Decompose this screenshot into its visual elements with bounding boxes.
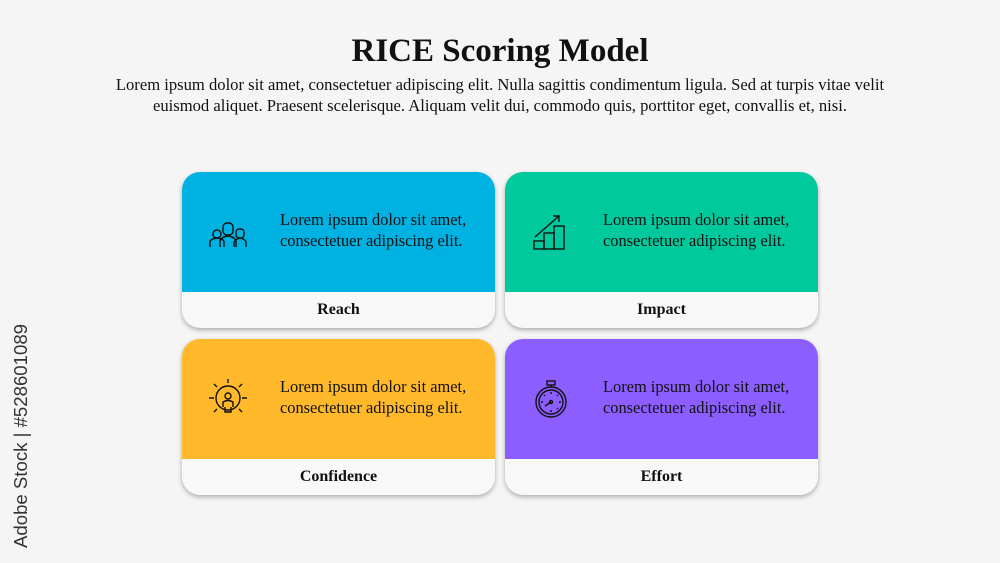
text: consectetuer adipiscing elit. — [280, 398, 463, 417]
text: Lorem ipsum dolor sit amet, — [603, 377, 789, 396]
watermark text: Adobe Stock | #528601089 — [10, 324, 31, 548]
text — [280, 377, 466, 417]
label: Confidence — [300, 468, 377, 485]
title: RICE Scoring Model — [352, 33, 648, 69]
subtitle: Lorem ipsum dolor sit amet, consectetuer adipiscing elit. Nulla sagittis condimentum ligula. Sed at turpis vitae velit euismod aliquet. Praesent scelerisque. Aliquam velit dui, commodo quis, porttitor eget, convallis et, nisi. — [116, 75, 884, 115]
text: Lorem ipsum dolor sit amet, — [603, 210, 789, 229]
icon: stopwatch — [535, 380, 567, 418]
text — [603, 210, 789, 250]
label: Effort — [641, 468, 682, 485]
panel: effort — [505, 339, 818, 495]
panel: impact — [505, 172, 818, 328]
text: consectetuer adipiscing elit. — [603, 231, 786, 250]
text — [603, 377, 789, 417]
text: Lorem ipsum dolor sit amet, — [280, 377, 466, 396]
text: Lorem ipsum dolor sit amet, — [280, 210, 466, 229]
icon: people — [209, 222, 247, 247]
text: consectetuer adipiscing elit. — [603, 398, 786, 417]
label: Reach — [317, 301, 360, 318]
icon: growth chart — [533, 215, 565, 250]
panel: confidence — [182, 339, 495, 495]
text: consectetuer adipiscing elit. — [280, 231, 463, 250]
text — [280, 210, 466, 250]
label: Impact — [637, 301, 686, 318]
panel: reach — [182, 172, 495, 328]
icon: lightbulb person — [209, 379, 247, 413]
